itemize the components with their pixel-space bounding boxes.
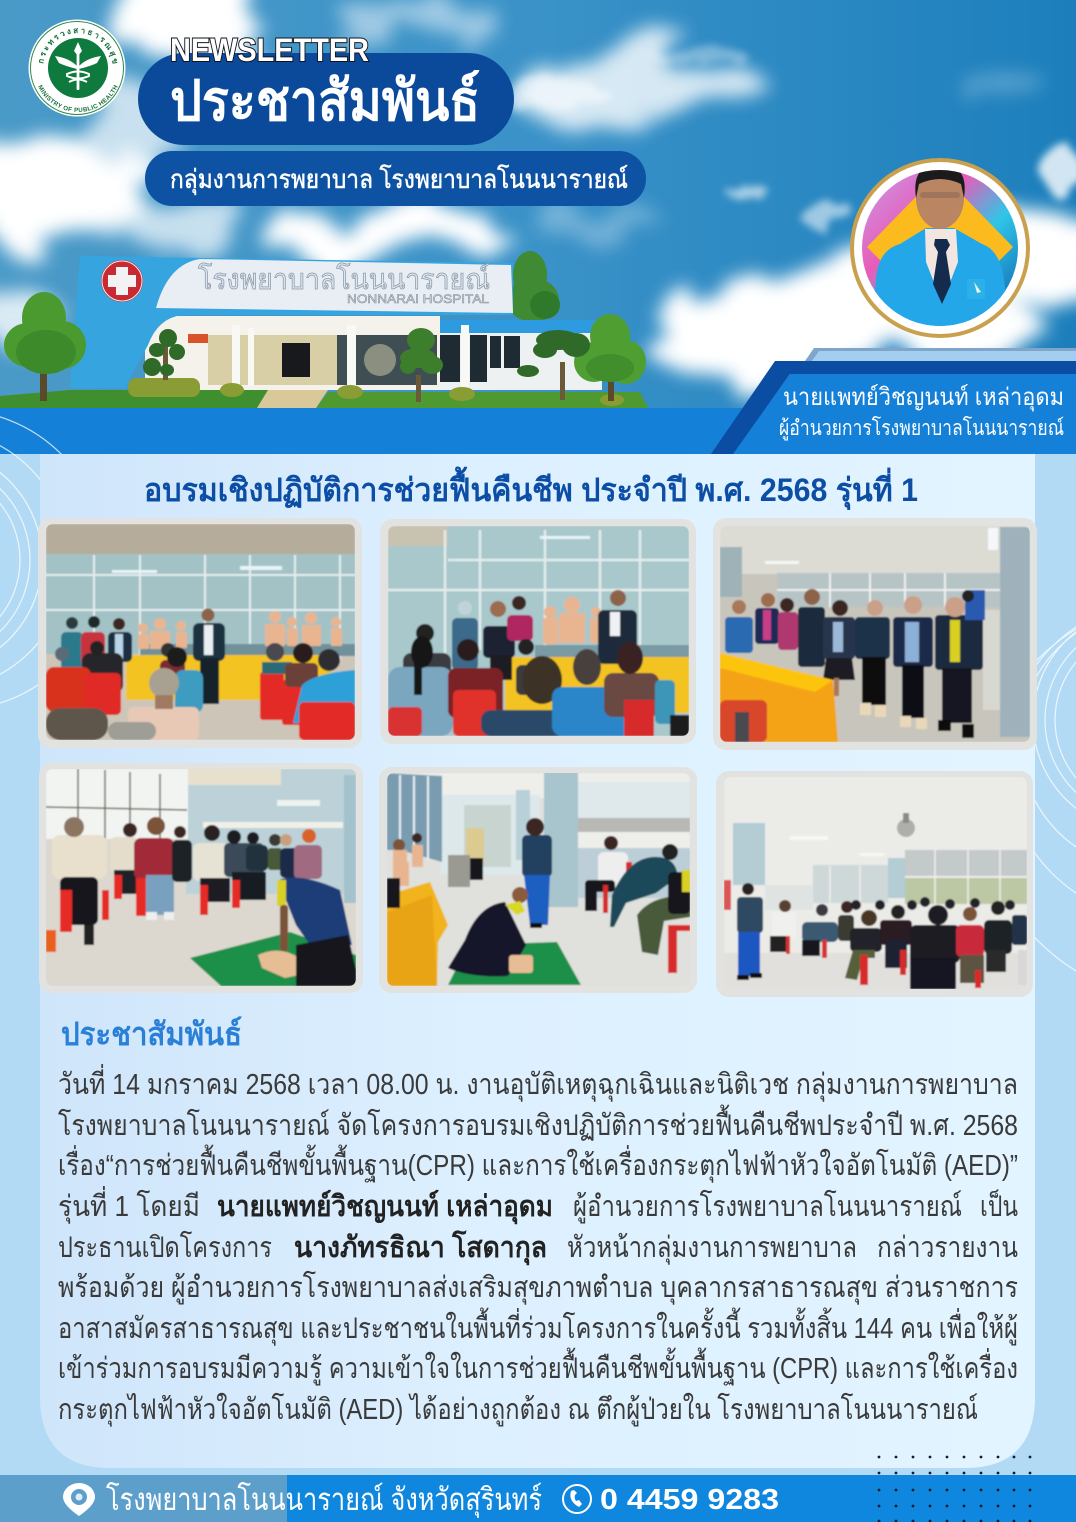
subtitle pill: กลุ่มงานการพยาบาล โรงพยาบาลโนนนารายณ์: [170, 164, 628, 195]
footer bar: [0, 1475, 1076, 1522]
photo 5: CPR demonstration: [379, 767, 697, 993]
logo thai text: กระทรวงสาธารณสุข: [38, 28, 118, 64]
main title: ประชาสัมพันธ์: [170, 69, 480, 132]
heading: อบรมเชิงปฏิบัติการช่วยฟื้นคืนชีพ ประจำปี พ.ศ. 2568 รุ่นที่ 1: [144, 466, 918, 511]
topiary right: [517, 330, 590, 400]
blue facade: [70, 256, 513, 388]
logo: Ministry of Public Health: [28, 20, 126, 116]
side rings left: [0, 410, 105, 710]
shrubs: [128, 378, 624, 406]
section heading: ประชาสัมพันธ์: [61, 1016, 242, 1052]
red cross emblem: [101, 260, 143, 302]
body paragraph: นายแพทย์วิชญนนท์ เหล่าอุดม: [217, 1189, 553, 1224]
title pill: [138, 32, 514, 145]
footer phone number: 0 4459 9283: [600, 1484, 779, 1516]
side rings right: [980, 600, 1076, 1000]
blue band: [0, 408, 1076, 454]
topiary left: [143, 329, 185, 380]
tree left: [4, 292, 86, 401]
logo emblem: [55, 42, 101, 90]
body paragraph: รุ่นที่ 1 โดยมี: [58, 1186, 200, 1224]
photo 3: group photo: [713, 518, 1037, 750]
footer address: โรงพยาบาลโนนนารายณ์ จังหวัดสุรินทร์: [106, 1482, 542, 1519]
photo 1: speaker with mannequins: [38, 518, 362, 748]
hospital building photo: [0, 251, 648, 408]
photo 6: wide room audience: [716, 771, 1033, 997]
white sign panel: [156, 259, 513, 313]
entrance interior: [145, 316, 440, 390]
back tree: [507, 251, 560, 322]
body paragraph: กล่าวรายงาน: [877, 1232, 1018, 1264]
newsletter label: NEWSLETTER: [170, 32, 369, 68]
logo english text: MINISTRY OF PUBLIC HEALTH: [38, 84, 118, 112]
subtitle pill: [145, 151, 646, 206]
icon: phone: [563, 1485, 591, 1513]
tree right: [574, 314, 646, 401]
icon: location pin: [63, 1483, 95, 1516]
right wing: [430, 330, 602, 390]
photo 4: CPR practice with seated audience: [39, 763, 363, 993]
topiary center: [400, 328, 443, 402]
photo 2: speakers and audience: [380, 519, 696, 744]
body paragraph: ประธานเปิดโครงการ: [58, 1230, 272, 1264]
dot pattern: [878, 1456, 1031, 1522]
sky with clouds: [0, 0, 1076, 410]
lawn: [0, 390, 268, 408]
body paragraph: หัวหน้ากลุ่มงานการพยาบาล: [567, 1232, 857, 1265]
name banner: [711, 348, 1076, 454]
body paragraph: เป็น: [980, 1188, 1018, 1223]
body paragraph: นางภัทรธิณา โสดากุล: [294, 1229, 547, 1265]
sign text: โรงพยาบาลโนนนารายณ์: [198, 262, 490, 296]
portrait of director: [850, 158, 1030, 340]
sign english text: NONNARAI HOSPITAL: [347, 292, 489, 306]
content panel: [40, 454, 1035, 1468]
body paragraph: ผู้อำนวยการโรงพยาบาลโนนนารายณ์: [573, 1189, 962, 1224]
columns: [232, 325, 469, 387]
body paragraph: [58, 1064, 1018, 1427]
